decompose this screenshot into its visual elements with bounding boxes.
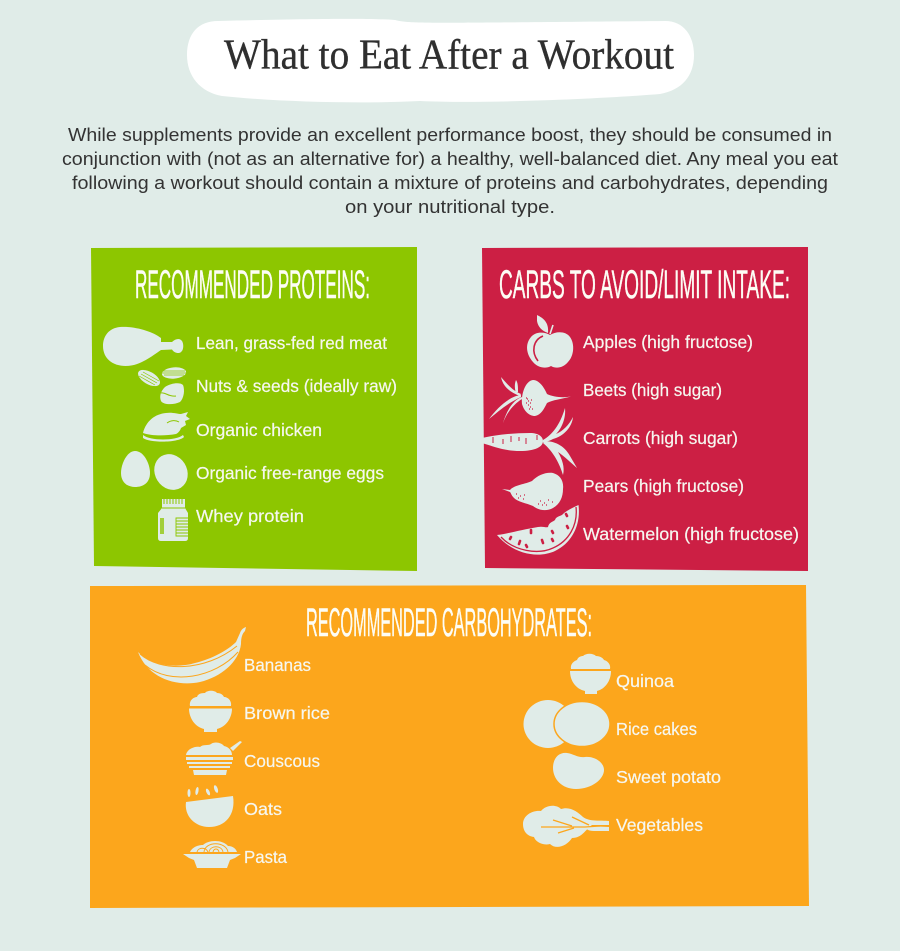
carbohydrate labels, left: Brown rice bbox=[244, 703, 330, 723]
title banner bbox=[187, 19, 694, 102]
icon: protein jar bbox=[158, 499, 188, 541]
intro paragraph: While supplements provide an excellent performance boost, they should be consumed in bbox=[68, 124, 832, 145]
icon: oats bowl bbox=[186, 785, 233, 827]
avoid labels: Watermelon (high fructose) bbox=[583, 524, 799, 544]
icon: eggs bbox=[121, 448, 194, 496]
carbohydrate labels, right: Sweet potato bbox=[616, 767, 721, 787]
icon: rice cakes bbox=[524, 700, 610, 748]
panel: recommended carbohydrates bbox=[90, 585, 809, 908]
intro paragraph: conjunction with (not as an alternative for) a healthy, well-balanced diet. Any meal you eat bbox=[62, 148, 839, 169]
icon: drumstick bbox=[103, 327, 183, 366]
protein labels: Organic chicken bbox=[196, 420, 322, 440]
icon: sweet potato bbox=[553, 753, 604, 789]
protein labels: Whey protein bbox=[196, 506, 304, 526]
icon: pasta plate bbox=[183, 841, 241, 868]
icon: banana bbox=[138, 627, 246, 683]
protein labels: Nuts & seeds (ideally raw) bbox=[196, 376, 397, 396]
icon: nuts bbox=[135, 366, 187, 404]
title: What to Eat After a Workout bbox=[224, 32, 674, 78]
protein labels: Organic free-range eggs bbox=[196, 463, 384, 483]
avoid labels bbox=[583, 332, 799, 544]
icon: quinoa bowl bbox=[570, 654, 611, 694]
avoid labels: Pears (high fructose) bbox=[583, 476, 744, 496]
intro paragraph bbox=[62, 124, 839, 217]
carbohydrate labels, left: Pasta bbox=[244, 847, 287, 867]
icon: pear bbox=[502, 473, 563, 510]
avoid labels: Beets (high sugar) bbox=[583, 380, 722, 400]
protein labels bbox=[196, 333, 397, 526]
icon: beet bbox=[489, 377, 571, 423]
icon: couscous bowl bbox=[186, 741, 242, 775]
icon: leafy vegetables bbox=[523, 806, 609, 847]
panel: carbs to avoid bbox=[482, 247, 808, 571]
avoid labels: Apples (high fructose) bbox=[583, 332, 753, 352]
intro paragraph: on your nutritional type. bbox=[345, 196, 555, 217]
carbohydrate labels, right: Vegetables bbox=[616, 815, 703, 835]
icon: watermelon bbox=[497, 505, 579, 555]
icon: carrot bbox=[482, 408, 577, 475]
carbohydrate labels, right: Rice cakes bbox=[616, 719, 697, 739]
panel: recommended proteins: RECOMMENDED PROTEINS: bbox=[135, 263, 370, 307]
panel: recommended proteins bbox=[91, 247, 417, 571]
icon: apple bbox=[527, 315, 573, 368]
carbohydrate labels, right: Quinoa bbox=[616, 671, 674, 691]
icon: roast chicken bbox=[143, 412, 190, 442]
protein labels: Lean, grass-fed red meat bbox=[196, 333, 387, 353]
carbohydrate labels, left: Couscous bbox=[244, 751, 320, 771]
carbohydrate labels, right bbox=[616, 671, 721, 835]
carbohydrate labels, left: Bananas bbox=[244, 655, 311, 675]
intro paragraph: following a workout should contain a mixture of proteins and carbohydrates, depending bbox=[72, 172, 828, 193]
carbohydrate labels, left: Oats bbox=[244, 799, 282, 819]
avoid labels: Carrots (high sugar) bbox=[583, 428, 738, 448]
icon: brown rice bowl bbox=[189, 691, 232, 732]
carbohydrate labels, left bbox=[244, 655, 330, 867]
